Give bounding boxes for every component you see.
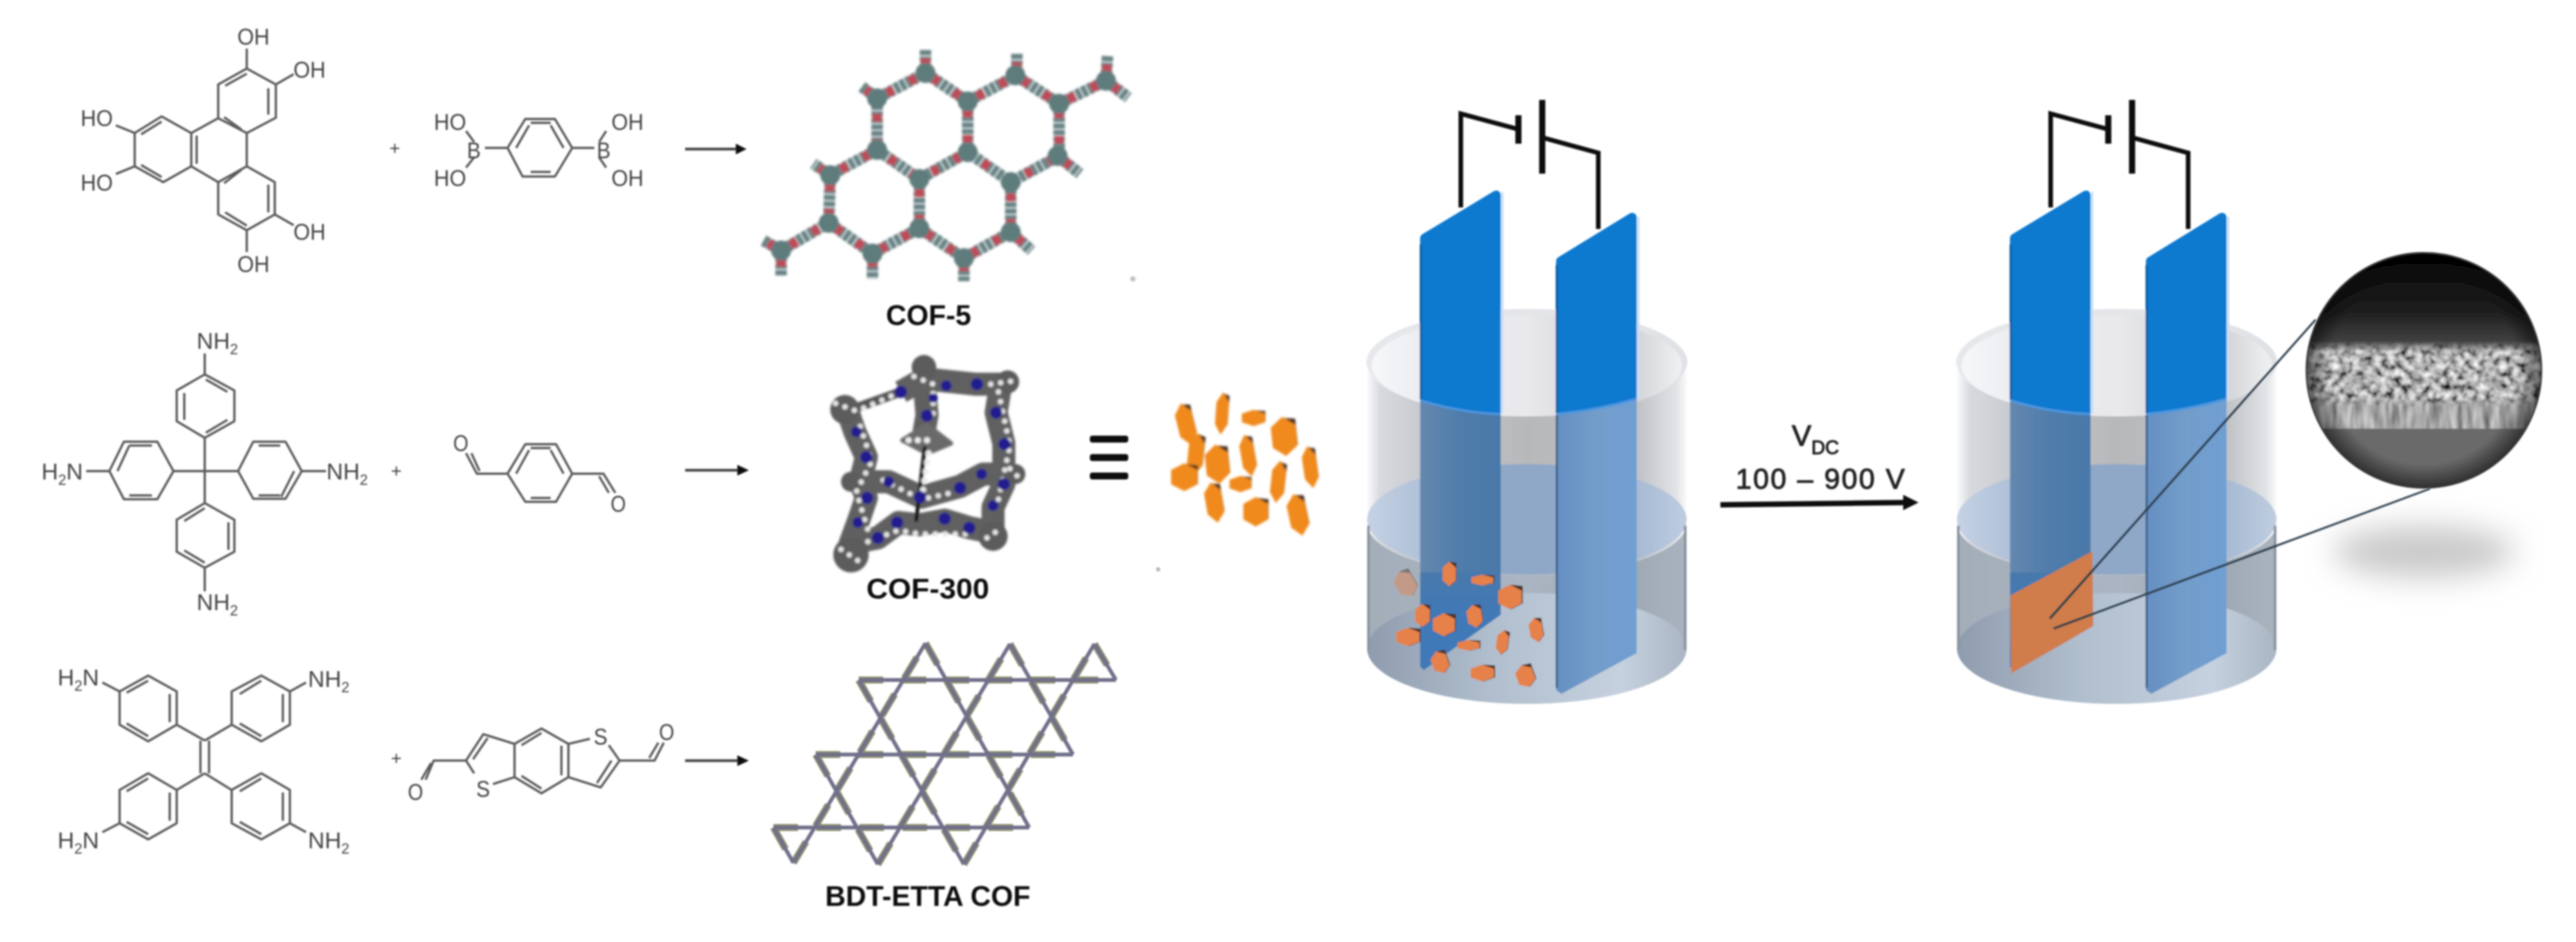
COF-5 honeycomb structure [763,50,1135,281]
atom labels: ETTA: NH [308,667,341,692]
atom labels: triphenylene [81,25,326,277]
label: COF-300: COF-300 [866,573,989,605]
atom labels: boronic acid [434,110,644,191]
plus sign row 2: + [391,461,402,482]
atom labels: BDT [408,720,674,805]
zoom lines from film to magnified view [2050,320,2430,629]
atom labels: terephthalaldehyde: O [611,492,626,517]
atom labels: ETTA: 2 [341,680,349,696]
label: voltage range: 100 – 900 V [1736,463,1905,495]
atom labels: terephthalaldehyde [453,431,626,517]
atom labels: triphenylene: OH [237,25,270,50]
atom labels: TAPM [41,329,368,619]
label: VDC: DC [1811,437,1839,459]
molecule: ETTA tetraaniline [58,665,349,857]
atom labels: ETTA: 2 [74,841,82,857]
atom labels: boronic acid: HO [434,166,466,191]
atom labels: TAPM: 2 [58,473,66,489]
atom labels: boronic acid: OH [611,110,644,135]
atom labels: TAPM: N [66,459,83,485]
atom labels: boronic acid: HO [434,110,466,135]
atom labels: BDT: O [408,780,423,805]
atom labels: triphenylene: OH [293,220,326,245]
atom labels: TAPM: NH [326,459,359,485]
molecule: tetrakis aminophenyl methane [41,329,368,619]
voltage arrow with label [1720,420,1919,510]
atom labels: ETTA [58,665,349,857]
plus sign row 1: + [389,138,400,159]
atom labels: TAPM: H [41,459,58,485]
COF nanoparticle cluster [1172,393,1320,536]
atom labels: ETTA: 2 [341,841,349,857]
atom labels: BDT: S [476,777,490,802]
deposited COF film [2011,553,2092,672]
arrow [1720,495,1919,510]
atom labels: ETTA: N [82,665,99,691]
atom labels: triphenylene: OH [237,252,270,277]
molecule: hexahydroxytriphenylene [81,25,326,277]
atom labels: ETTA: H [58,828,74,854]
atom labels: ETTA: 2 [74,678,82,695]
atom labels: TAPM: NH [197,329,230,354]
arrow row 2 [685,465,749,476]
atom labels: TAPM: NH [197,590,230,615]
atom labels: triphenylene: HO [81,171,113,196]
electrochemical cell with deposited COF film [1956,100,2277,704]
atom labels: ETTA: NH [308,828,341,854]
atom labels: boronic acid: B [467,138,481,164]
atom labels: boronic acid: OH [611,166,644,191]
arrow row 1 [685,144,747,154]
atom labels: TAPM: 2 [230,342,238,358]
atom labels: boronic acid: B [597,138,611,164]
dispersed COF particles [1390,562,1545,690]
atom labels: TAPM: 2 [230,603,238,619]
atom labels: ETTA: N [82,828,99,854]
atom labels: triphenylene: OH [293,58,326,83]
atom labels: TAPM: 2 [359,473,368,489]
BDT-ETTA COF kagome structure [773,643,1116,864]
magnified SEM cross-section [2304,253,2550,498]
atom labels: terephthalaldehyde: O [453,431,469,456]
COF-300 framework structure [830,355,1025,572]
equivalence symbol [1090,436,1128,479]
plus sign row 3: + [391,748,402,769]
label: VDC: V [1792,420,1811,453]
shadow below magnified view [2333,526,2515,578]
arrow row 3 [685,755,749,766]
molecule: terephthalaldehyde [453,431,626,517]
atom labels: BDT: O [659,720,674,745]
molecule: benzene diboronic acid [434,110,644,191]
atom labels: BDT: S [594,725,608,750]
label: COF-5: COF-5 [886,300,971,331]
atom labels: triphenylene: HO [81,106,113,131]
atom labels: ETTA: H [58,665,74,691]
electrochemical cell with dispersed COF particles [1366,100,1687,704]
molecule: BDT dialdehyde [408,720,674,805]
label: BDT-ETTA COF: BDT-ETTA COF [825,881,1031,912]
